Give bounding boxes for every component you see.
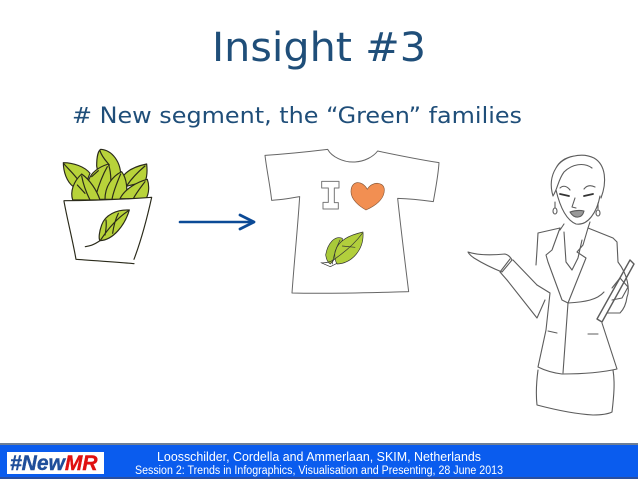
pot outline xyxy=(64,197,152,264)
right arm xyxy=(607,262,628,313)
earrings xyxy=(555,202,598,209)
icon: t-shirt xyxy=(265,149,439,293)
face xyxy=(556,190,600,224)
small leaf on pot xyxy=(99,210,129,241)
arrow xyxy=(180,215,254,229)
footer text line 1: Loosschilder, Cordella and Ammerlaan, SKIM, Netherlands xyxy=(157,449,481,464)
clipboard xyxy=(597,260,634,322)
neck and collar xyxy=(560,222,590,230)
footer text line 2: Session 2: Trends in Infographics, Visualisation and Presenting, 28 June 2013 xyxy=(135,465,503,477)
mouth xyxy=(570,210,584,217)
hair xyxy=(551,155,605,198)
letter I xyxy=(322,181,339,209)
logo: #NewMR xyxy=(10,452,98,475)
icon: pot of leaves xyxy=(63,149,152,264)
jacket xyxy=(536,228,618,265)
shirt leaves xyxy=(326,238,342,264)
footer band xyxy=(0,443,638,479)
skirt xyxy=(536,370,614,415)
heart xyxy=(351,183,384,210)
title: Insight #3 xyxy=(212,25,426,71)
subtitle: # New segment, the “Green” families xyxy=(72,103,522,129)
shirt outline xyxy=(265,149,439,293)
waist marks xyxy=(548,331,598,334)
left arm and hand xyxy=(468,252,512,272)
icon: businesswoman xyxy=(468,155,634,415)
